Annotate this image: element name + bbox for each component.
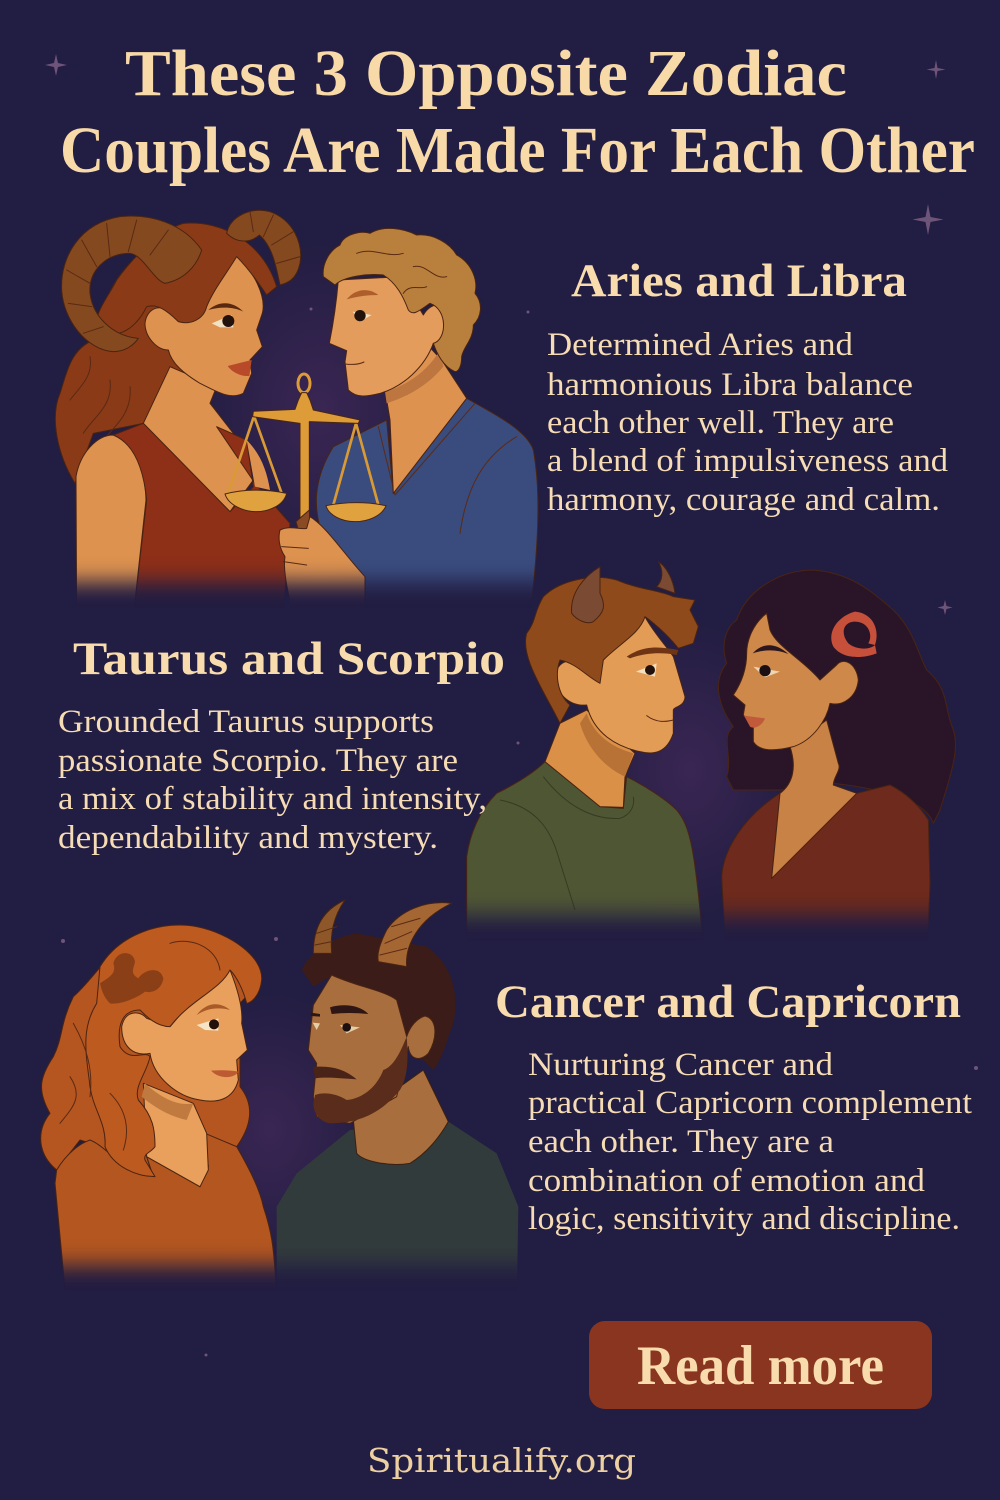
button: Read more: Read more [637, 1335, 884, 1397]
purple glow: couple 2 [580, 620, 800, 920]
man: Libra with blue shirt [316, 228, 538, 617]
text block: Cancer and Capricorn [528, 1047, 972, 1237]
heading: Taurus and Scorpio: Taurus and Scorpio [73, 633, 505, 685]
text block: Cancer and Capricorn: each other. They are a [528, 1124, 834, 1160]
icon: red scorpion hair clip [831, 612, 877, 657]
text block: Aries and Libra: each other well. They are [547, 405, 894, 441]
woman: Aries with ram horns [55, 210, 301, 617]
footer: site name: Spiritualify.org [367, 1441, 636, 1480]
text block: Cancer and Capricorn: Nurturing Cancer and [528, 1047, 834, 1083]
title [60, 37, 975, 187]
purple glow: couple 3 [160, 990, 380, 1270]
text block: Aries and Libra: harmony, courage and calm. [547, 482, 940, 518]
illustration: Cancer and Capricorn couple [41, 900, 518, 1307]
text block: Aries and Libra: harmonious Libra balance [547, 367, 913, 403]
text block: Taurus and Scorpio: passionate Scorpio. They are [58, 743, 458, 779]
text block: Aries and Libra [547, 327, 949, 518]
text block: Taurus and Scorpio: a mix of stability and intensity, [58, 781, 487, 817]
illustration: Aries and Libra couple [55, 210, 538, 617]
text block: Cancer and Capricorn: combination of emotion and [528, 1163, 926, 1199]
text block: Taurus and Scorpio: Grounded Taurus supports [58, 704, 434, 740]
icon: golden libra scales [225, 374, 386, 617]
text block: Cancer and Capricorn: practical Capricorn complement [528, 1085, 972, 1121]
text block: Cancer and Capricorn: logic, sensitivity and discipline. [528, 1201, 960, 1237]
text block: Taurus and Scorpio [58, 704, 487, 856]
man: Capricorn with goat horns and beard [277, 900, 518, 1307]
heading: Cancer and Capricorn: Cancer and Capricorn [495, 976, 961, 1028]
text block: Taurus and Scorpio: dependability and mystery. [58, 820, 438, 856]
button: Read more [589, 1321, 932, 1409]
heading: Aries and Libra: Aries and Libra [571, 255, 907, 307]
title: These 3 Opposite Zodiac [125, 37, 847, 110]
purple glow: couple 1 [190, 240, 450, 580]
man: Taurus with small horns [467, 562, 705, 967]
text block: Aries and Libra: Determined Aries and [547, 327, 854, 363]
illustration: Taurus and Scorpio couple [467, 562, 955, 967]
text block: Aries and Libra: a blend of impulsiveness and [547, 443, 949, 479]
woman: Cancer with wavy auburn hair [41, 925, 277, 1307]
woman: Scorpio with dark curly hair [718, 570, 955, 967]
